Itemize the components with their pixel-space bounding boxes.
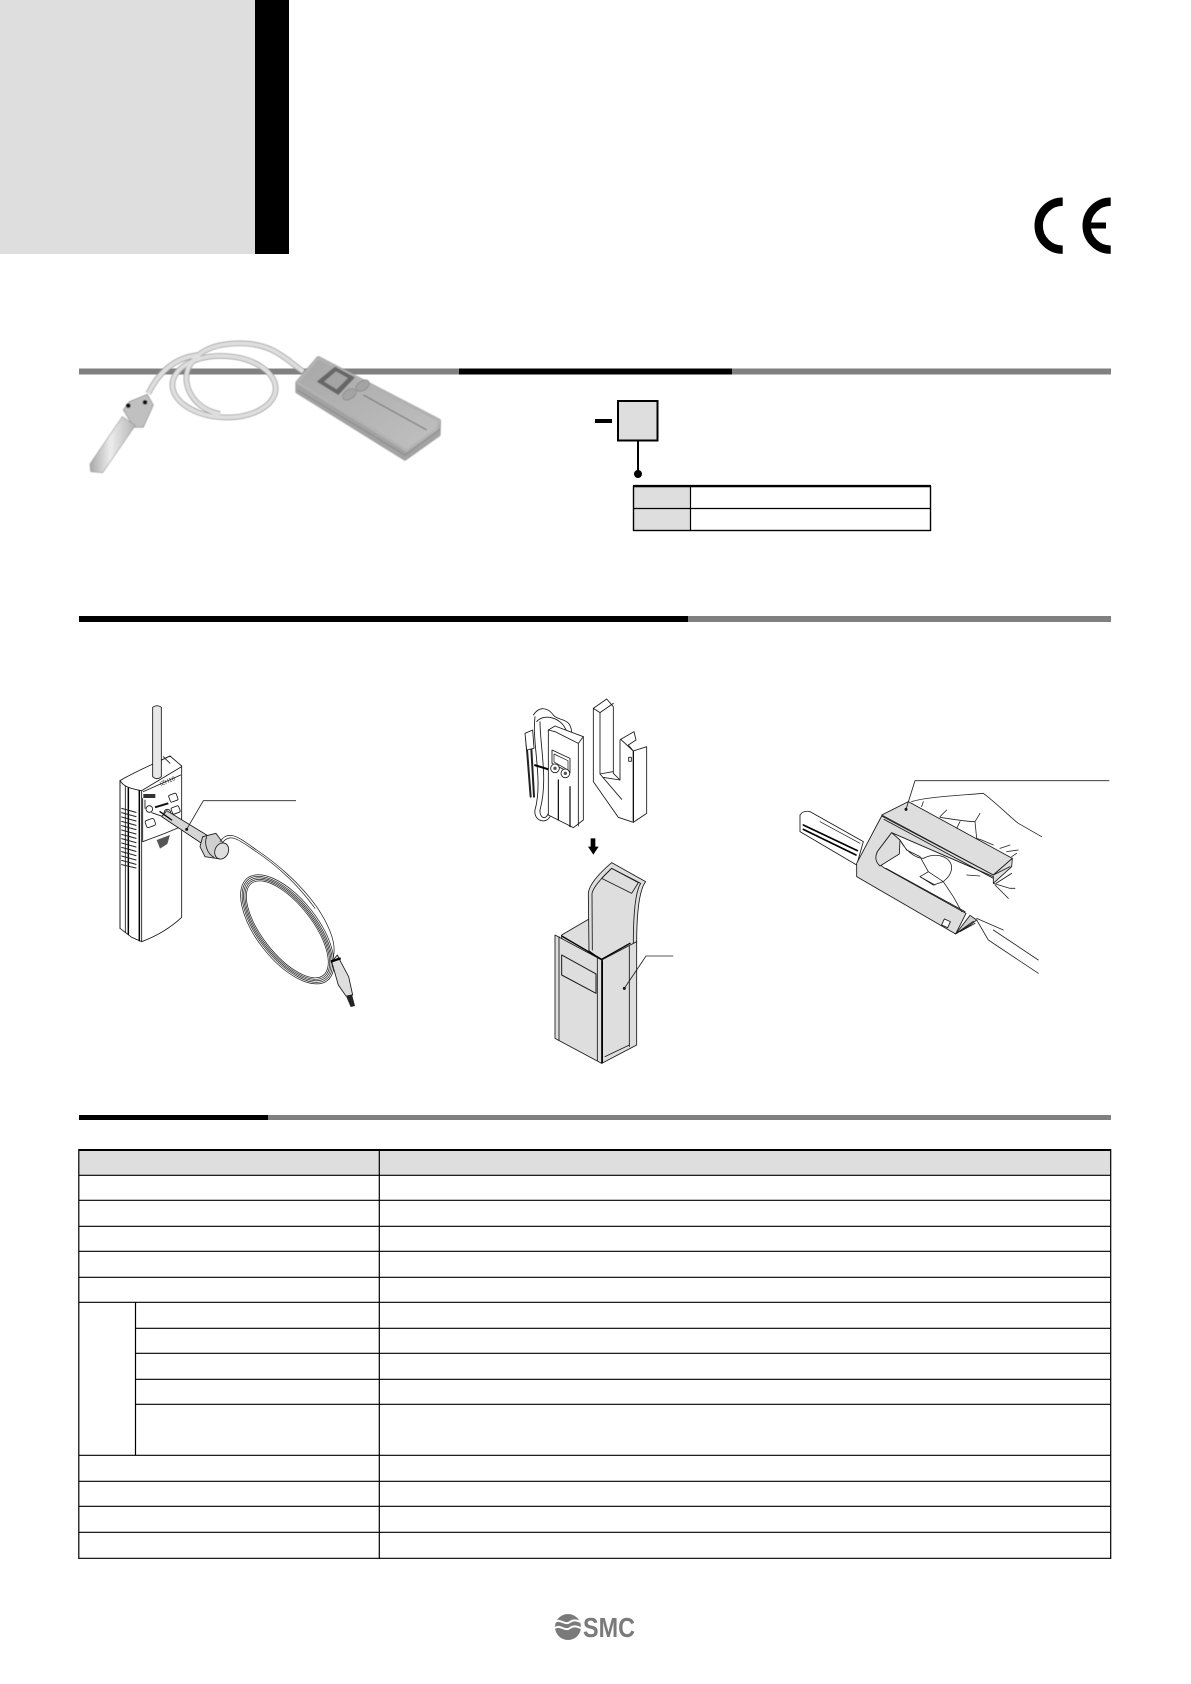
meter with wound cable [525, 709, 583, 828]
illustration: meter and bracket going into carrying case [525, 699, 673, 1063]
section rule: specifications [79, 1115, 1111, 1120]
section rule: how to order [79, 368, 1111, 374]
arrow [588, 838, 599, 855]
carrying case [555, 863, 673, 1063]
product photo: handheld meter with probe and cable [90, 343, 440, 473]
table header [79, 1150, 1111, 1175]
SMC logo [555, 1612, 635, 1643]
leader with dot [637, 441, 639, 474]
part number diagram [595, 401, 931, 531]
U-shaped bracket [593, 699, 647, 822]
specifications table [78, 1149, 1111, 1559]
illustration: hand holding grip handle [800, 781, 1109, 973]
hand lines [900, 793, 1042, 973]
illustration: ioniser meter with check terminal and cable [120, 706, 355, 1007]
icon: CE mark [1039, 202, 1111, 250]
illustration: ioniser meter with check terminal and cable: IZH10 [159, 776, 177, 788]
option table [633, 486, 931, 531]
header tab: black bar [255, 0, 289, 254]
section rule: options [79, 616, 1111, 622]
grip top face [882, 802, 1012, 875]
grip front face [857, 816, 1012, 934]
option box [618, 401, 658, 440]
hyphen [595, 419, 612, 423]
header tab: grey block [0, 0, 255, 254]
probe stem [800, 811, 863, 865]
SMC logo: SMC [583, 1612, 635, 1643]
